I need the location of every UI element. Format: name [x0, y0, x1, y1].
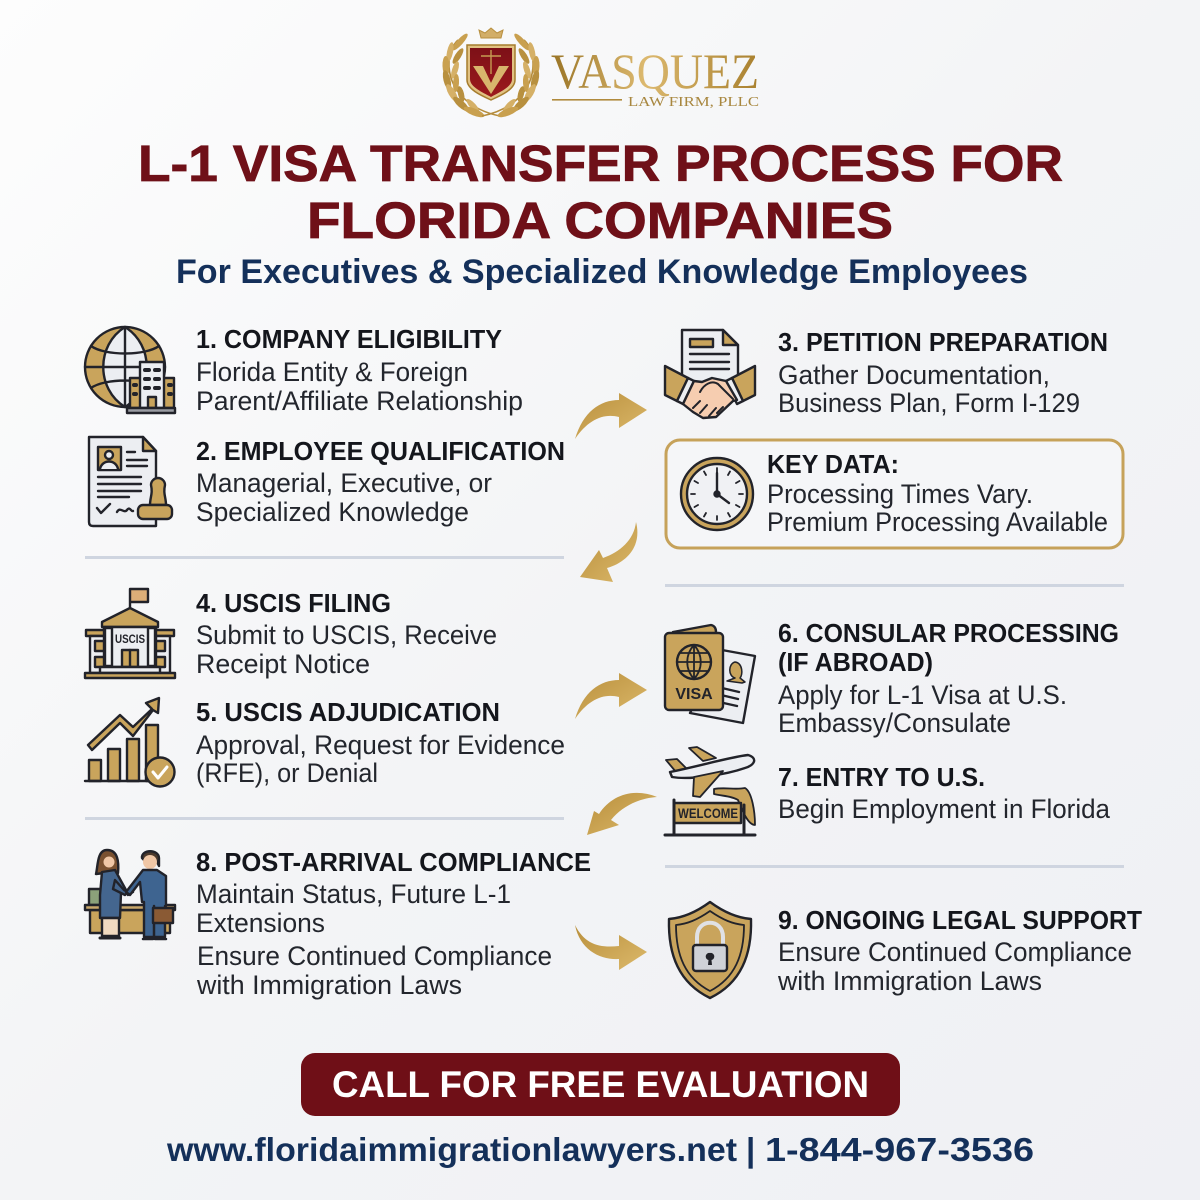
text — [196, 468, 492, 527]
icon: USCIS building — [85, 589, 175, 678]
text: Florida Entity & Foreign — [196, 357, 468, 387]
icon: document and handshake — [665, 330, 755, 418]
text: Parent/Affiliate Relationship — [196, 386, 523, 416]
icon: laurel wreath — [441, 32, 541, 119]
text: Receipt Notice — [196, 649, 370, 679]
title — [138, 135, 1063, 249]
title: L-1 VISA TRANSFER PROCESS FOR — [138, 135, 1063, 192]
text: Specialized Knowledge — [196, 497, 469, 527]
icon: globe and building — [85, 327, 175, 413]
text: (RFE), or Denial — [196, 758, 378, 788]
contact line: | — [746, 1131, 755, 1168]
heading: 9. ONGOING LEGAL SUPPORT — [778, 905, 1142, 935]
text: Extensions — [196, 908, 325, 938]
icon: growth chart and check — [85, 698, 174, 786]
text — [778, 680, 1067, 738]
arrow: step 7 to 8 — [587, 793, 657, 835]
step 2: employee qualification — [89, 436, 565, 527]
call to action button: CALL FOR FREE EVALUATION — [332, 1064, 869, 1105]
subtitle: For Executives & Specialized Knowledge Employees — [176, 253, 1028, 291]
heading: 2. EMPLOYEE QUALIFICATION — [196, 436, 565, 466]
text: with Immigration Laws — [196, 970, 462, 1000]
heading: 4. USCIS FILING — [196, 588, 391, 618]
heading: 5. USCIS ADJUDICATION — [196, 697, 500, 727]
text: Business Plan, Form I-129 — [778, 388, 1080, 418]
step 7: entry to U.S. — [665, 747, 1110, 835]
callout: key data — [666, 440, 1123, 548]
arrow: step 2 to 3 — [575, 393, 647, 439]
heading: KEY DATA: — [767, 449, 899, 479]
text: Embassy/Consulate — [778, 708, 1011, 738]
icon: plane and welcome sign — [665, 747, 755, 835]
icon: document and stamp — [89, 437, 172, 526]
step 9: ongoing legal support — [669, 902, 1142, 998]
text: Processing Times Vary. — [767, 479, 1033, 509]
heading — [778, 618, 1119, 677]
text: Approval, Request for Evidence — [196, 730, 565, 760]
text: Premium Processing Available — [767, 507, 1108, 537]
icon: shield — [467, 45, 515, 100]
step 8: post-arrival compliance — [85, 847, 591, 1000]
step 3: petition preparation — [665, 327, 1108, 418]
icon: clock — [681, 458, 753, 530]
icon: visa passport — [665, 625, 755, 723]
heading: 6. CONSULAR PROCESSING — [778, 618, 1119, 648]
text: Ensure Continued Compliance — [197, 941, 552, 971]
step 5: USCIS adjudication — [85, 697, 565, 788]
logo: Vasquez Law Firm — [441, 28, 759, 119]
text: Ensure Continued Compliance — [778, 937, 1132, 967]
text — [777, 937, 1132, 996]
text — [196, 620, 497, 679]
step 1: company eligibility — [85, 324, 523, 416]
icon: two people shaking hands — [85, 850, 175, 939]
contact line: 1-844-967-3536 — [765, 1131, 1034, 1168]
icon label: USCIS — [115, 632, 145, 646]
text: Submit to USCIS, Receive — [196, 620, 497, 650]
text — [196, 879, 552, 1000]
text: Apply for L-1 Visa at U.S. — [778, 680, 1067, 710]
contact line — [166, 1131, 1034, 1168]
text — [196, 730, 565, 788]
logo tagline: LAW FIRM, PLLC — [628, 95, 759, 110]
step 4: USCIS filing — [85, 588, 497, 679]
heading: 7. ENTRY TO U.S. — [778, 762, 985, 792]
heading: (IF ABROAD) — [778, 647, 933, 677]
logo wordmark: VASQUEZ — [551, 43, 759, 99]
icon label: VISA — [675, 686, 713, 703]
text: Maintain Status, Future L-1 — [196, 879, 511, 909]
icon: crown — [479, 28, 503, 38]
arrow: step 8 to 9 — [575, 925, 647, 970]
text: Managerial, Executive, or — [196, 468, 492, 498]
contact line: www.floridaimmigrationlawyers.net — [166, 1131, 737, 1168]
text — [196, 357, 523, 416]
text — [778, 360, 1080, 418]
title: FLORIDA COMPANIES — [307, 192, 893, 249]
heading: 1. COMPANY ELIGIBILITY — [196, 324, 502, 354]
icon label: WELCOME — [678, 806, 738, 821]
call to action button — [301, 1053, 900, 1116]
text: with Immigration Laws — [777, 966, 1042, 996]
heading: 3. PETITION PREPARATION — [778, 327, 1108, 357]
step 6: consular processing — [665, 618, 1119, 738]
text — [767, 479, 1108, 537]
icon: shield and lock — [669, 902, 751, 998]
arrow: key data to step 4 — [580, 522, 637, 582]
heading: 8. POST-ARRIVAL COMPLIANCE — [196, 847, 591, 877]
text: Gather Documentation, — [778, 360, 1050, 390]
arrow: step 5 to 6 — [575, 673, 647, 719]
text: Begin Employment in Florida — [778, 794, 1110, 824]
